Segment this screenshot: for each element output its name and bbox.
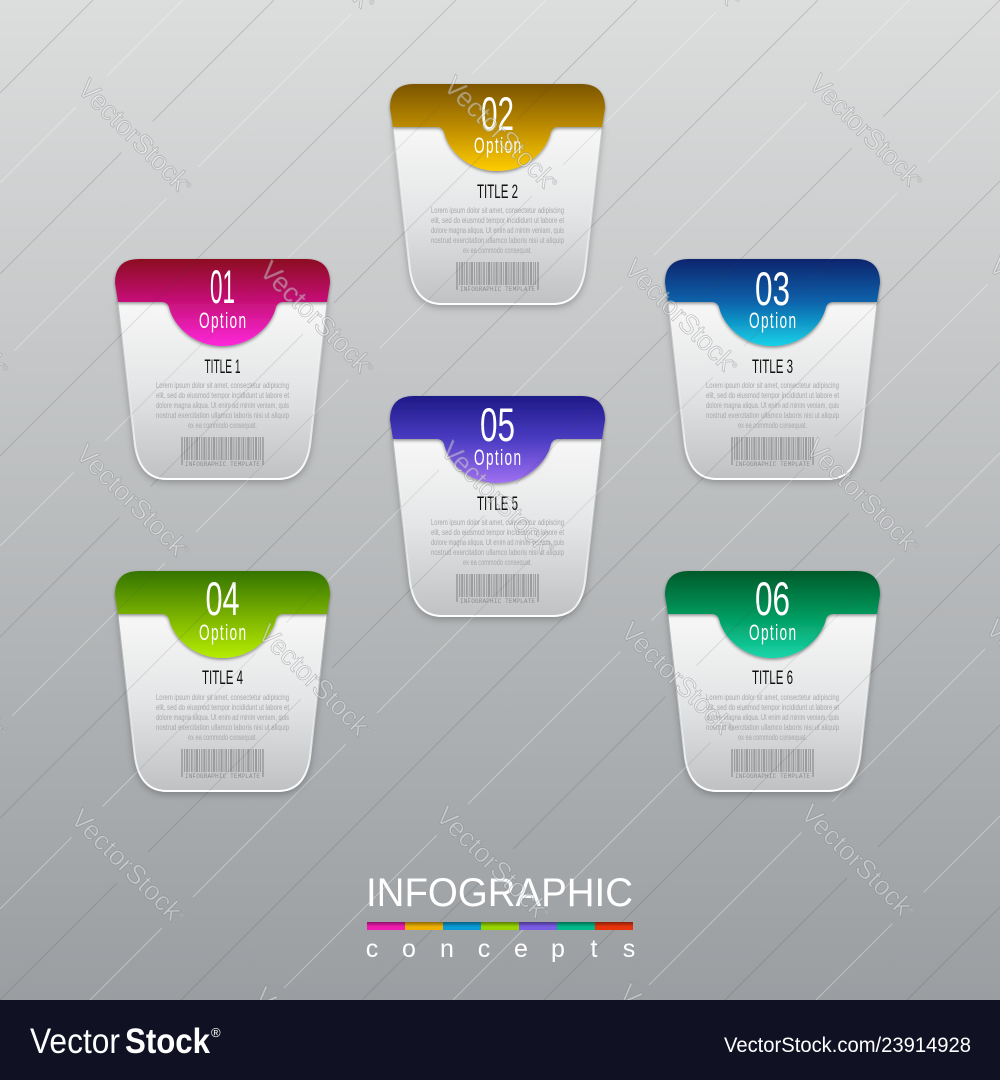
watermarks: ® (907, 906, 917, 916)
card 2 text: elit, sed do eiusmod tempor incididunt ut labore et (431, 216, 565, 225)
card 2 barcode: INFOGRAPHIC TEMPLATE (460, 286, 535, 293)
card 2 title: TITLE 2 (477, 182, 518, 203)
card 4 text: elit, sed do eiusmod tempor incididunt ut labore et (156, 703, 290, 712)
card 6 text: ex ea commodo consequat. (738, 733, 807, 742)
card 3 option: Option (749, 308, 796, 333)
card 6 header band (665, 571, 880, 658)
footer logo: Stock (125, 1022, 210, 1061)
card 2 (390, 84, 605, 304)
watermarks: VectorStock (618, 253, 741, 376)
watermarks: VectorStock (803, 68, 926, 191)
card 5 text: dolore magna aliqua. Ut enim ad minim veniam, quis (431, 538, 564, 547)
watermarks: ® (177, 911, 187, 921)
card 2 number: 02 (481, 87, 514, 140)
card 3 body (668, 299, 877, 479)
card 3 text: ex ea commodo consequat. (738, 421, 807, 430)
card 5 text: nostrud exercitation ullamco laboris nisi ut aliquip (431, 548, 564, 557)
card 4 text: ex ea commodo consequat. (188, 733, 257, 742)
watermarks: ® (915, 176, 925, 186)
card 3 (665, 259, 880, 479)
card 6 body (668, 611, 877, 791)
watermarks: VectorStock (72, 73, 195, 196)
card 3 header band (665, 259, 880, 346)
watermarks: ® (547, 543, 557, 553)
footer logo: ® (211, 1025, 221, 1040)
colour bar (367, 922, 633, 930)
watermarks: VectorStock (252, 618, 375, 741)
heading: INFOGRAPHIC: INFOGRAPHIC (366, 871, 633, 915)
card 6 text (706, 693, 840, 742)
card 3 number: 03 (755, 262, 790, 315)
card 5 barcode (457, 574, 538, 605)
footer image id: VectorStock.com/23914928 (724, 1034, 971, 1057)
card 2 body (393, 124, 602, 304)
card 6 option: Option (749, 620, 796, 645)
card 5 text: ex ea commodo consequat. (463, 558, 532, 567)
watermarks: VectorStock (435, 435, 558, 558)
card 4 text (156, 693, 290, 742)
card 6 barcode (732, 749, 813, 780)
card 3 barcode: INFOGRAPHIC TEMPLATE (735, 461, 810, 468)
card 1: 01 (210, 260, 235, 313)
card 1 text: dolore magna aliqua. Ut enim ad minim veniam, quis (156, 401, 289, 410)
card 5 header band (390, 396, 605, 483)
watermarks: VectorStock (800, 433, 923, 556)
watermarks: VectorStock (615, 616, 738, 739)
card 1 title: TITLE 1 (204, 357, 240, 378)
card 5 (390, 396, 605, 616)
card 6 text: Lorem ipsum dolor sit amet, consectetur adipiscing (706, 693, 839, 702)
watermarks: ® (550, 178, 560, 188)
card 2 text: dolore magna aliqua. Ut enim ad minim veniam, quis (431, 226, 564, 235)
card 5 text (431, 518, 565, 567)
card 3 title: TITLE 3 (752, 357, 793, 378)
card 4 (115, 571, 330, 791)
card 1 text (156, 381, 290, 430)
card 4 body (118, 611, 327, 791)
watermarks: ® (182, 546, 192, 556)
watermarks: ® (366, 363, 376, 373)
card 4 text: Lorem ipsum dolor sit amet, consectetur adipiscing (156, 693, 289, 702)
watermarks: ® (727, 724, 737, 734)
watermarks: VectorStock (65, 803, 188, 926)
card 6 text: dolore magna aliqua. Ut enim ad minim veniam, quis (706, 713, 839, 722)
card 4 header band (115, 571, 330, 658)
card 4 text: nostrud exercitation ullamco laboris nisi ut aliquip (156, 723, 289, 732)
card 2 text: ex ea commodo consequat. (463, 246, 532, 255)
card 4 barcode: INFOGRAPHIC TEMPLATE (185, 773, 260, 780)
card 1 text: ex ea commodo consequat. (188, 421, 257, 430)
card 5 body (393, 436, 602, 616)
diagonal lines over cards (118, 84, 876, 791)
card 4 barcode (182, 749, 263, 780)
card 5 text: Lorem ipsum dolor sit amet, consectetur adipiscing (431, 518, 564, 527)
card 5 number: 05 (480, 398, 515, 451)
card 5 title: TITLE 5 (477, 494, 518, 515)
card 6 text: elit, sed do eiusmod tempor incididunt ut labore et (706, 703, 840, 712)
watermarks: VectorStock (70, 438, 193, 561)
card 2 text: nostrud exercitation ullamco laboris nisi ut aliquip (431, 236, 564, 245)
card 2 text: Lorem ipsum dolor sit amet, consectetur adipiscing (431, 206, 564, 215)
card 4 number: 04 (206, 572, 240, 625)
card 6 text: nostrud exercitation ullamco laboris nisi ut aliquip (706, 723, 839, 732)
card 1 (115, 259, 330, 479)
card 2 header band (390, 84, 605, 171)
card 5 text: elit, sed do eiusmod tempor incididunt ut labore et (431, 528, 565, 537)
card 5 barcode: INFOGRAPHIC TEMPLATE (460, 598, 535, 605)
card 1 barcode: INFOGRAPHIC TEMPLATE (185, 461, 260, 468)
watermarks: VectorStock (254, 255, 377, 378)
card 3 text: nostrud exercitation ullamco laboris nisi ut aliquip (706, 411, 839, 420)
watermarks: ® (542, 908, 552, 918)
card 2 option: Option (474, 133, 521, 158)
footer bar (0, 1000, 1000, 1080)
card 6 barcode: INFOGRAPHIC TEMPLATE (735, 773, 810, 780)
card 5 option: Option (474, 445, 521, 470)
bottom title block (366, 871, 635, 963)
watermarks: VectorStock (430, 800, 553, 923)
footer logo (30, 1022, 221, 1061)
subheading: concepts: concepts (366, 935, 635, 963)
watermarks: ® (912, 541, 922, 551)
watermarks: ® (1, 364, 11, 374)
card 3 text: elit, sed do eiusmod tempor incididunt ut labore et (706, 391, 840, 400)
card 6 number: 06 (755, 572, 790, 625)
card 1 text: elit, sed do eiusmod tempor incididunt ut labore et (156, 391, 290, 400)
card 4 option: Option (199, 620, 246, 645)
card 2 barcode (457, 262, 538, 293)
watermarks: ® (184, 181, 194, 191)
watermarks: VectorStock (438, 70, 561, 193)
watermarks: ® (730, 361, 740, 371)
card 1 option: Option (199, 308, 246, 333)
footer logo: Vector (30, 1022, 120, 1061)
card 6 title: TITLE 6 (752, 668, 793, 689)
card 4 text: dolore magna aliqua. Ut enim ad minim veniam, quis (156, 713, 289, 722)
card 6 (665, 571, 880, 791)
card 3 text: dolore magna aliqua. Ut enim ad minim veniam, quis (706, 401, 839, 410)
card 1 text: Lorem ipsum dolor sit amet, consectetur adipiscing (156, 381, 289, 390)
card 3 barcode (732, 437, 813, 468)
card 1 body (118, 299, 327, 479)
card 3 text (706, 381, 840, 430)
card 1 barcode (182, 437, 263, 468)
card 2 text (431, 206, 565, 255)
card 1 header band (115, 259, 330, 346)
card 4 title: TITLE 4 (202, 668, 243, 689)
card 1 text: nostrud exercitation ullamco laboris nisi ut aliquip (156, 411, 289, 420)
watermarks: VectorStock (795, 798, 918, 921)
card 3 text: Lorem ipsum dolor sit amet, consectetur adipiscing (706, 381, 839, 390)
watermarks: ® (364, 726, 374, 736)
